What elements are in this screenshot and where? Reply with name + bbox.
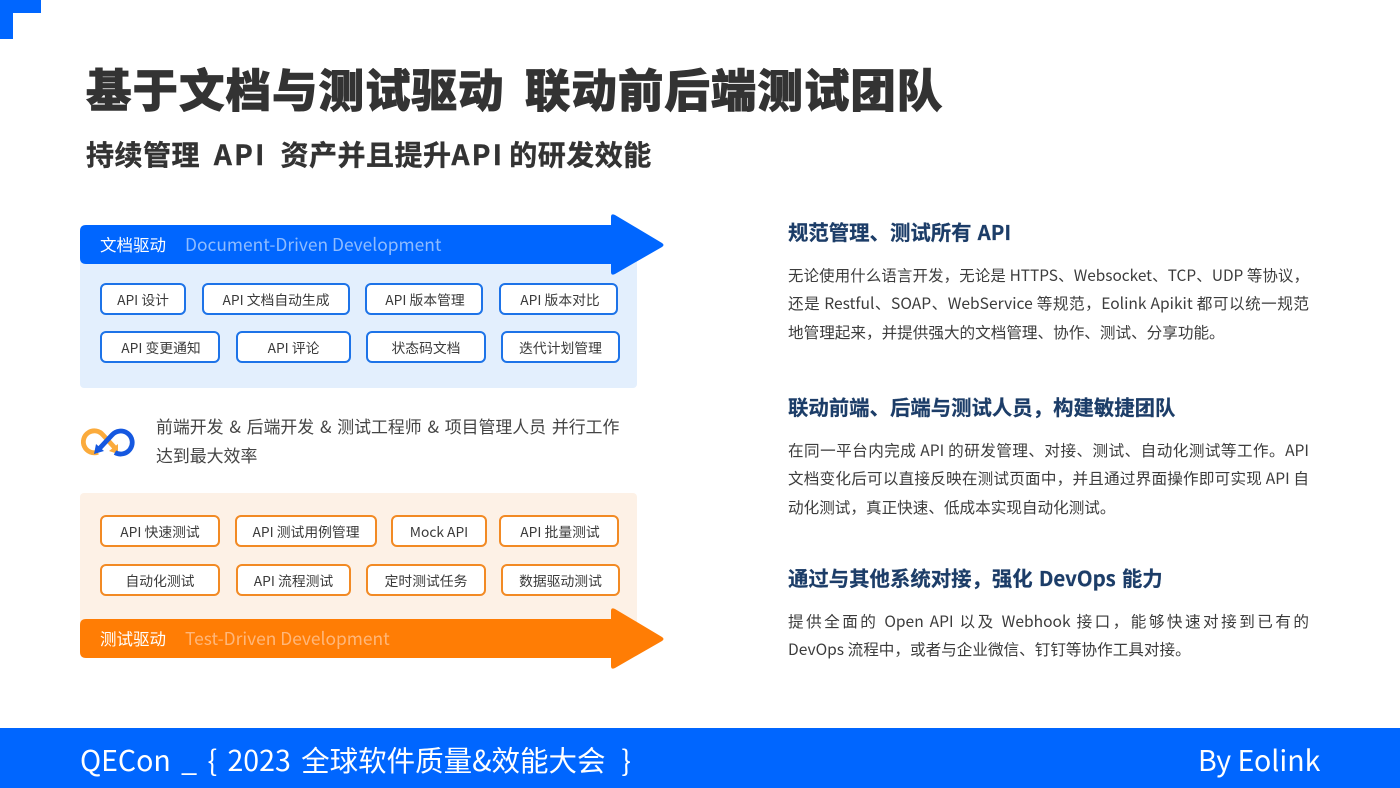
chip: API 测试用例管理 bbox=[252, 521, 360, 541]
corner mark bbox=[0, 0, 41, 39]
text block: agile team bbox=[788, 439, 1309, 518]
chip bbox=[499, 283, 618, 315]
chip bbox=[501, 331, 620, 363]
chip bbox=[100, 515, 220, 547]
chip: 状态码文档 bbox=[392, 337, 460, 357]
chip bbox=[499, 515, 619, 547]
text block: DevOps bbox=[788, 610, 1309, 660]
chip bbox=[202, 283, 350, 315]
arrow: document-driven bbox=[80, 214, 664, 275]
heading: manage APIs: 规范管理、测试所有 API bbox=[788, 216, 1011, 246]
chip bbox=[366, 331, 486, 363]
heading: DevOps: 通过与其他系统对接，强化 DevOps 能力 bbox=[788, 562, 1163, 592]
chip: API 快速测试 bbox=[120, 521, 200, 541]
chip: API 版本对比 bbox=[520, 289, 600, 309]
chip bbox=[365, 283, 483, 315]
arrow label: english: Document-Driven Development bbox=[185, 232, 441, 257]
chip: API 设计 bbox=[117, 289, 169, 309]
title: 基于文档与测试驱动 联动前后端测试团队 bbox=[86, 55, 943, 121]
text block: manage APIs: 无论使用什么语言开发，无论是 HTTPS、Websocket、TCP、UDP 等协议， bbox=[788, 264, 1309, 286]
text block: manage APIs bbox=[788, 264, 1309, 343]
arrow label: test-driven: 测试驱动 bbox=[100, 626, 166, 650]
chip: 数据驱动测试 bbox=[519, 570, 602, 590]
panel: test-driven bbox=[80, 493, 664, 669]
panel background bbox=[80, 493, 637, 623]
chip bbox=[391, 515, 487, 547]
footer left text: QECon _ { 2023 全球软件质量&效能大会 } bbox=[80, 739, 631, 780]
chip: 自动化测试 bbox=[126, 570, 194, 590]
chip: 定时测试任务 bbox=[385, 570, 467, 590]
text block: manage APIs: 地管理起来，并提供强大的文档管理、协作、测试、分享功能。 bbox=[788, 321, 1225, 343]
middle text bbox=[156, 413, 619, 467]
text block: DevOps: DevOps 流程中，或者与企业微信、钉钉等协作工具对接。 bbox=[788, 638, 1191, 660]
text block: DevOps: 提供全面的 Open API 以及 Webhook 接口，能够快速对接到已有的 bbox=[788, 610, 1309, 632]
chip: API 变更通知 bbox=[121, 337, 201, 357]
arrow label: document-driven: 文档驱动 bbox=[100, 232, 166, 256]
chip: API 批量测试 bbox=[520, 521, 600, 541]
text block: agile team: 文档变化后可以直接反映在测试页面中，并且通过界面操作即可实现 API 自 bbox=[788, 467, 1309, 489]
heading: agile team: 联动前端、后端与测试人员，构建敏捷团队 bbox=[788, 391, 1175, 421]
chip: API 评论 bbox=[268, 337, 319, 357]
chip bbox=[236, 564, 351, 596]
chip bbox=[236, 331, 351, 363]
icon: infinity loop bbox=[81, 428, 135, 456]
arrow label: english: Test-Driven Development bbox=[185, 626, 390, 651]
chip: 迭代计划管理 bbox=[519, 337, 602, 357]
chip bbox=[366, 564, 486, 596]
chip bbox=[501, 564, 620, 596]
chip: API 版本管理 bbox=[385, 289, 465, 309]
footer right text: By Eolink bbox=[1198, 739, 1320, 780]
text block: manage APIs: 还是 Restful、SOAP、WebService 等规范，Eolink Apikit 都可以统一规范 bbox=[788, 292, 1309, 314]
chip: Mock API bbox=[410, 521, 468, 541]
chip bbox=[235, 515, 377, 547]
subtitle: 持续管理 API 资产并且提升API的研发效能 bbox=[86, 134, 652, 174]
chip bbox=[100, 331, 220, 363]
panel: document-driven bbox=[80, 214, 664, 388]
middle text: 达到最大效率 bbox=[156, 442, 257, 467]
panel background bbox=[80, 254, 637, 388]
chip: API 流程测试 bbox=[254, 570, 333, 590]
chip bbox=[100, 564, 220, 596]
arrow: test-driven bbox=[80, 608, 664, 669]
footer bar bbox=[0, 728, 1400, 788]
chip bbox=[100, 283, 186, 315]
text block: agile team: 在同一平台内完成 API 的研发管理、对接、测试、自动化测试等工作。API bbox=[788, 439, 1309, 461]
text block: agile team: 动化测试，真正快速、低成本实现自动化测试。 bbox=[788, 496, 1115, 518]
chip: API 文档自动生成 bbox=[222, 289, 330, 309]
middle text: 前端开发 & 后端开发 & 测试工程师 & 项目管理人员 并行工作 bbox=[156, 413, 619, 438]
